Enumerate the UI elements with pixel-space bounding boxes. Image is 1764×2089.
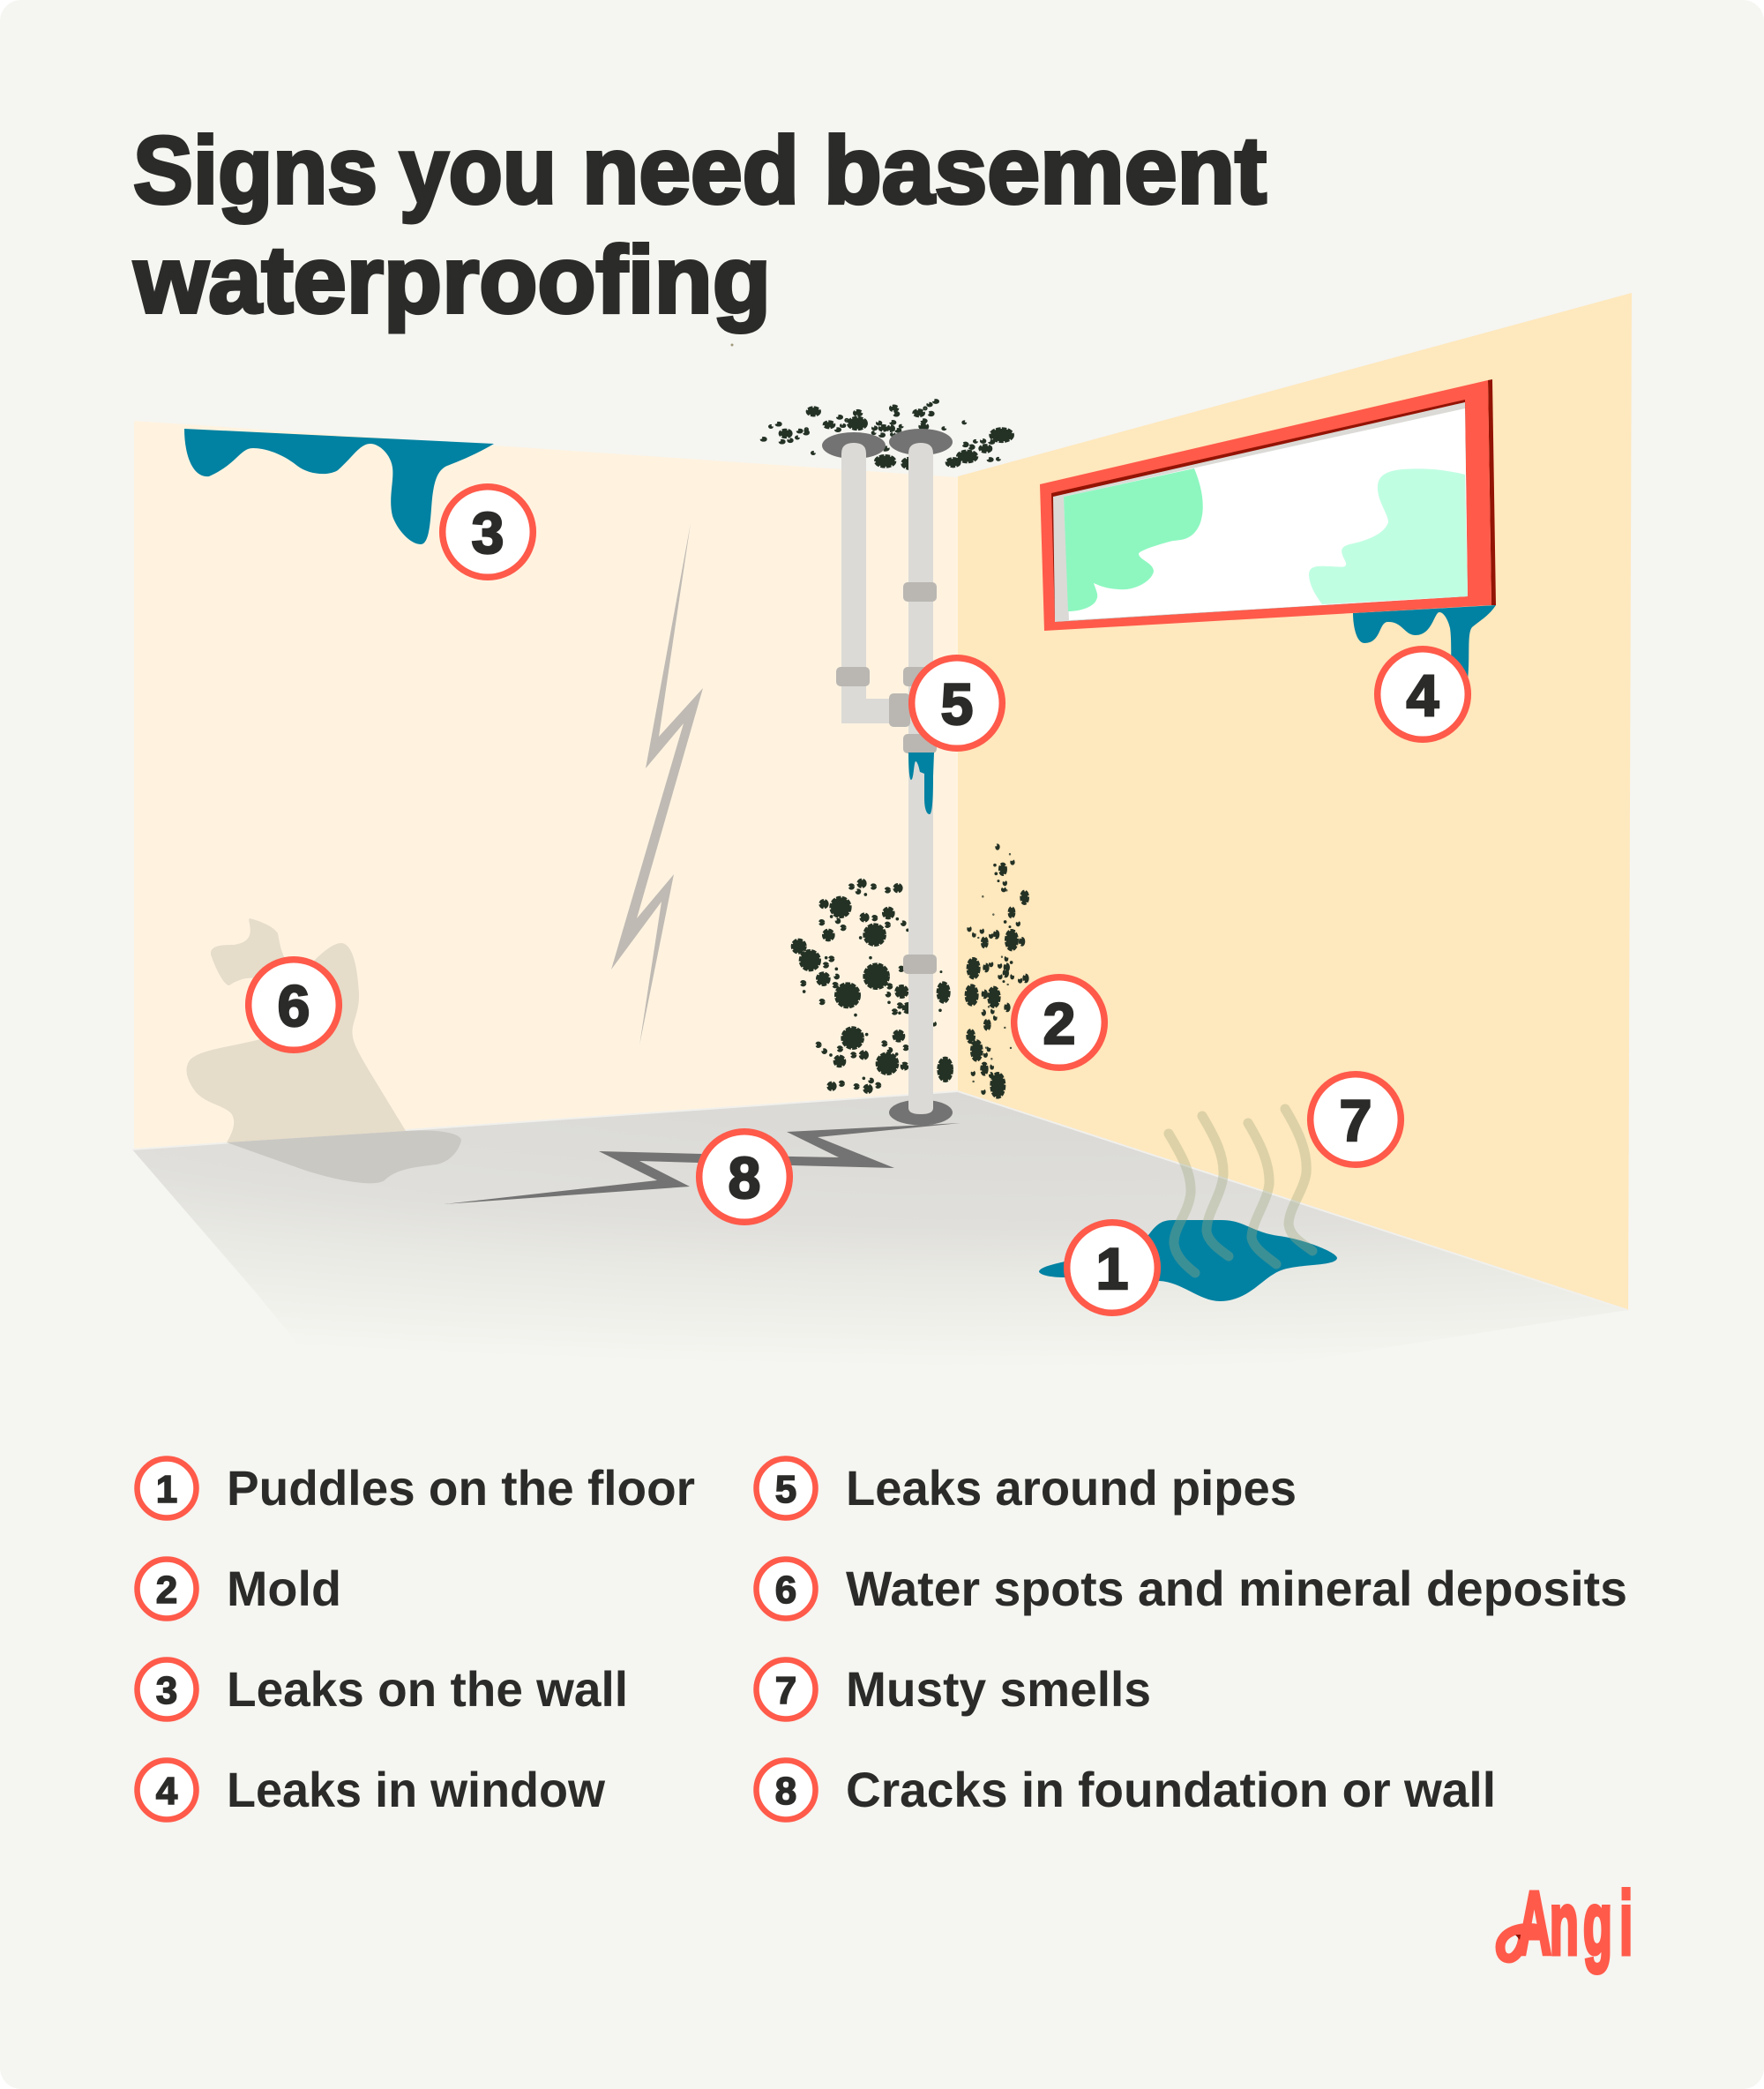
puddle	[1039, 1220, 1337, 1301]
title: need	[582, 116, 799, 223]
wall mold	[792, 845, 1028, 1097]
badge 4: 4	[1407, 663, 1439, 728]
legend item 1: Puddles on the floor	[227, 1460, 695, 1516]
legend	[138, 1459, 1627, 1819]
window	[1040, 379, 1496, 631]
window leak	[1353, 605, 1496, 679]
pipes	[822, 429, 953, 1126]
badge 4	[1378, 649, 1468, 739]
title: Signs	[133, 116, 377, 223]
Angi logo: Angi	[1517, 1875, 1633, 1973]
legend item 6: 6	[775, 1569, 796, 1612]
left wall	[134, 421, 958, 1149]
legend item 3: 3	[156, 1669, 177, 1712]
badge 8	[699, 1132, 789, 1222]
legend item 2: Mold	[227, 1561, 341, 1616]
legend item 5: Leaks around pipes	[846, 1460, 1297, 1516]
floor stain shadow	[227, 1130, 461, 1183]
badge 1: 1	[1096, 1236, 1128, 1301]
legend item 1: 1	[156, 1468, 177, 1511]
legend item 4: Leaks in window	[227, 1762, 605, 1817]
wall stain: water spots and mineral deposits	[186, 918, 406, 1142]
badge 3: 3	[472, 500, 504, 565]
badge 6	[249, 960, 339, 1050]
right wall	[958, 293, 1632, 1310]
legend item 5: 5	[775, 1468, 796, 1511]
badge 5: 5	[941, 671, 973, 737]
wall crack	[611, 523, 703, 1045]
title: you	[400, 116, 557, 223]
musty smell lines	[1169, 1109, 1312, 1273]
badge 7	[1311, 1074, 1401, 1164]
legend item 4: 4	[156, 1770, 178, 1813]
badge 7: 7	[1340, 1088, 1372, 1153]
legend item 2: 2	[156, 1569, 177, 1612]
badge 8: 8	[729, 1145, 760, 1210]
wall leak	[184, 429, 494, 544]
badge 1	[1067, 1223, 1157, 1313]
title	[133, 116, 1267, 333]
legend item 6: Water spots and mineral deposits	[846, 1561, 1627, 1616]
legend item 8: 8	[775, 1770, 796, 1813]
badge 5	[912, 658, 1002, 748]
basement illustration	[132, 293, 1632, 1411]
pipe leak drip	[908, 752, 934, 814]
badge 3	[443, 487, 533, 577]
ceiling mold	[761, 401, 1013, 468]
legend item 3: Leaks on the wall	[227, 1661, 628, 1717]
floor crack	[444, 1123, 960, 1204]
badge 6: 6	[278, 973, 310, 1038]
legend item 7: 7	[775, 1669, 796, 1712]
title: waterproofing	[133, 226, 771, 333]
title: basement	[824, 116, 1267, 223]
legend item 7: Musty smells	[846, 1661, 1151, 1717]
legend item 8: Cracks in foundation or wall	[846, 1762, 1496, 1817]
legend item 2	[138, 1560, 341, 1618]
floor	[132, 1091, 1627, 1411]
badge 2	[1014, 977, 1104, 1067]
badge 2: 2	[1043, 991, 1075, 1056]
